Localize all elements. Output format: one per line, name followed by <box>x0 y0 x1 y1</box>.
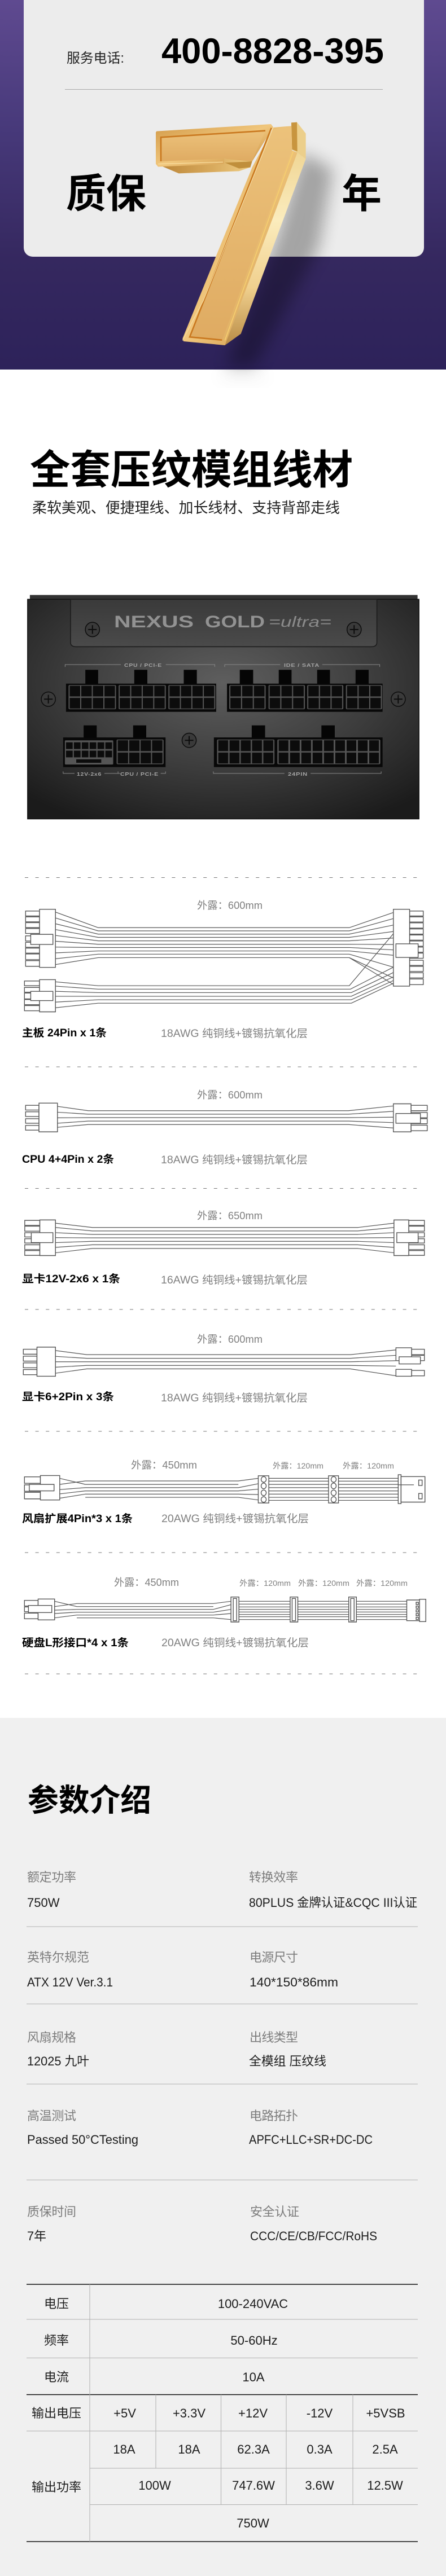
brand suffix: =ultra= <box>269 613 331 630</box>
connector bracket lines <box>63 665 381 773</box>
warranty word left: 质保 <box>66 172 146 217</box>
cable name: 风扇扩展4Pin*3 x 1条 <box>22 1512 133 1525</box>
spec: efficiency <box>249 1870 417 1910</box>
spec: fan: 风扇规格 <box>27 2030 76 2045</box>
top housing strip <box>30 595 418 600</box>
power table <box>27 2284 418 2542</box>
cable name: 主板 24Pin x 1条 <box>22 1027 107 1039</box>
section title: parameters: 参数介绍 <box>28 1783 151 1818</box>
table row: output power: 3.6W <box>305 2478 334 2493</box>
spec: high temperature: 高温测试 <box>27 2109 76 2123</box>
cable: fan 4pin extension <box>22 1460 425 1525</box>
warranty word right: 年 <box>342 172 382 217</box>
dashed separators <box>25 878 423 1674</box>
port label 12V: 12V-2x6 <box>77 771 102 777</box>
gold numeral 7 <box>156 122 306 345</box>
cable: CPU 4+4pin <box>22 1089 427 1166</box>
table row: output voltage: +12V <box>238 2406 268 2420</box>
cable: GPU 6+2pin <box>22 1334 425 1404</box>
spec: fan <box>27 2030 89 2068</box>
cable drawing <box>24 1475 425 1504</box>
spec: certification <box>250 2205 377 2243</box>
spec: rated power <box>27 1870 76 1910</box>
spec: rated power: 额定功率 <box>27 1870 76 1884</box>
wire spec: 20AWG 纯铜线+镀锡抗氧化层 <box>161 1513 309 1525</box>
spec: cable type: 全模组 压纹线 <box>249 2054 326 2068</box>
table row: voltage <box>44 2297 288 2311</box>
table row: output current: 2.5A <box>372 2442 398 2456</box>
table row: output current: 18A <box>113 2442 135 2456</box>
spec: size: 140*150*86mm <box>250 1975 338 1989</box>
spec: high temperature: Passed 50°CTesting <box>27 2133 138 2147</box>
table row: output current <box>113 2442 398 2456</box>
table row: output current: 18A <box>178 2442 200 2456</box>
spec: topology <box>249 2109 373 2147</box>
cable name: 显卡12V-2x6 x 1条 <box>22 1273 120 1285</box>
port label CPU lower: CPU / PCI-E <box>120 771 159 777</box>
brand plate <box>71 599 377 647</box>
spec: fan: 12025 九叶 <box>27 2054 89 2068</box>
table row: output power: 747.6W <box>232 2478 275 2493</box>
wire spec: 18AWG 纯铜线+镀锡抗氧化层 <box>161 1027 308 1040</box>
table row: frequency: 频率 <box>44 2333 69 2348</box>
cable name: 显卡6+2Pin x 3条 <box>22 1391 114 1403</box>
service phone number: 400-8828-395 <box>161 32 384 71</box>
parameters panel <box>0 1718 446 2576</box>
lower connectors <box>63 726 383 767</box>
table row: output current: 62.3A <box>237 2442 270 2456</box>
cable: motherboard 24pin <box>22 900 423 1040</box>
service card <box>24 0 424 257</box>
table rules <box>27 2284 418 2542</box>
wire spec: 16AWG 纯铜线+镀锡抗氧化层 <box>161 1274 308 1286</box>
table row: output voltage: +5V <box>113 2406 136 2420</box>
cable name: 硬盘L形接口*4 x 1条 <box>22 1636 129 1649</box>
section subtitle: 柔软美观、便捷理线、加长线材、支持背部走线 <box>32 499 340 516</box>
spec dividers <box>27 1927 418 2180</box>
section title: cables: 全套压纹模组线材 <box>30 448 353 493</box>
table row: output power: 输出功率 <box>32 2480 81 2494</box>
cable drawing <box>24 909 423 1012</box>
spec: certification: CCC/CE/CB/FCC/RoHS <box>250 2229 377 2243</box>
port labels: CPU / PCI-E <box>124 662 162 668</box>
spec: warranty <box>27 2205 76 2243</box>
wire spec: 18AWG 纯铜线+镀锡抗氧化层 <box>161 1392 308 1404</box>
spec: intel standard: 英特尔规范 <box>27 1950 89 1964</box>
table row: output voltage: -12V <box>307 2406 333 2420</box>
faint shadow under banner <box>215 371 271 383</box>
table row: voltage: 100-240VAC <box>218 2297 288 2311</box>
table row: output power <box>32 2478 403 2494</box>
cable drawing <box>25 1103 427 1132</box>
port label 24PIN: 24PIN <box>288 771 308 777</box>
upper connectors <box>66 670 383 712</box>
main length label: 外露：450mm <box>131 1460 197 1471</box>
spec: rated power: 750W <box>27 1896 60 1910</box>
cable drawing <box>24 1597 426 1622</box>
table row: voltage: 电压 <box>44 2297 69 2311</box>
wire spec: 20AWG 纯铜线+镀锡抗氧化层 <box>161 1637 309 1649</box>
table row: output voltage: 输出电压 <box>32 2406 81 2420</box>
table row: current <box>44 2370 265 2384</box>
length label: 外露：600mm <box>197 1089 263 1101</box>
table row: frequency: 50-60Hz <box>230 2333 278 2348</box>
table row: current: 10A <box>242 2370 265 2384</box>
spec: topology: 电路拓扑 <box>250 2109 298 2123</box>
spec: topology: APFC+LLC+SR+DC-DC <box>249 2133 373 2147</box>
port label IDE: IDE / SATA <box>284 662 320 668</box>
main length label: 外露：450mm <box>114 1577 179 1588</box>
table row: output voltage: +3.3V <box>173 2406 205 2420</box>
cable: SATA L connector <box>22 1577 426 1649</box>
length label: 外露：650mm <box>197 1210 263 1221</box>
table row: total power: 750W <box>237 2516 269 2530</box>
spec: cable type: 出线类型 <box>250 2030 298 2045</box>
table row: output voltage: +5VSB <box>366 2406 405 2420</box>
table row: output current: 0.3A <box>307 2442 333 2456</box>
spec: warranty: 7年 <box>27 2229 46 2243</box>
spec: efficiency: 80PLUS 金牌认证&CQC III认证 <box>249 1896 417 1910</box>
brand name second word: GOLD <box>205 613 265 631</box>
segment length two: 外露：120mm <box>343 1461 394 1470</box>
segment length one: 外露：120mm <box>239 1579 291 1588</box>
segment length one: 外露：120mm <box>273 1461 323 1470</box>
spec: certification: 安全认证 <box>250 2205 299 2219</box>
cable drawing <box>25 1220 425 1256</box>
table row: frequency <box>44 2333 278 2348</box>
card divider <box>65 89 383 90</box>
grey background <box>0 1718 446 2576</box>
spec: intel standard <box>27 1950 113 1989</box>
service phone label: 服务电话: <box>67 51 124 66</box>
cable drawing <box>23 1347 425 1376</box>
shadow of the numeral on card <box>226 152 333 367</box>
length label: 外露：600mm <box>197 900 263 911</box>
PSU modular panel <box>28 595 419 819</box>
cable name: CPU 4+4Pin x 2条 <box>22 1153 114 1166</box>
warranty banner <box>0 0 446 370</box>
purple gradient background <box>0 0 446 370</box>
spec: size: 电源尺寸 <box>250 1950 298 1964</box>
spec: efficiency: 转换效率 <box>249 1870 298 1884</box>
segment length three: 外露：120mm <box>356 1579 408 1588</box>
brand name: NEXUS <box>114 613 194 631</box>
spec: intel standard: ATX 12V Ver.3.1 <box>27 1975 113 1989</box>
table row: output voltage <box>32 2406 405 2420</box>
screws <box>41 622 405 748</box>
table row: output power: 12.5W <box>367 2478 403 2493</box>
spec: size <box>250 1950 338 1989</box>
spec: warranty: 质保时间 <box>27 2205 76 2219</box>
table row: current: 电流 <box>44 2370 69 2384</box>
spec: high temperature <box>27 2109 138 2147</box>
panel body <box>28 599 419 819</box>
spec: cable type <box>249 2030 326 2068</box>
cable: GPU 12V-2x6 <box>22 1210 425 1286</box>
wire spec: 18AWG 纯铜线+镀锡抗氧化层 <box>161 1154 308 1166</box>
table row: output power: 100W <box>138 2478 171 2493</box>
segment length two: 外露：120mm <box>298 1579 349 1588</box>
length label: 外露：600mm <box>197 1334 263 1345</box>
